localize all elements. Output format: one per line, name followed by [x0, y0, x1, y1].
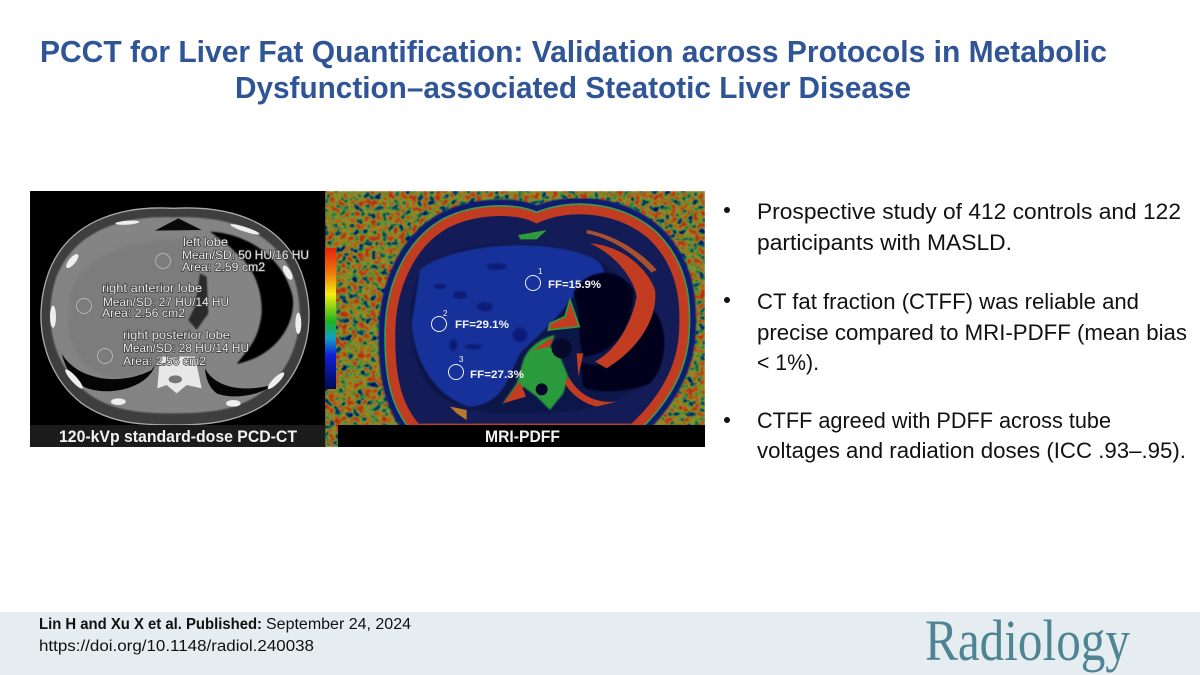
citation: https://doi.org/10.1148/radiol.240038: [39, 638, 314, 655]
bullet 3: [724, 408, 1186, 463]
MRI annotations: [443, 267, 601, 381]
bullet 2: [724, 289, 1187, 375]
footer band: [0, 608, 1200, 675]
CT annotations: Area: 2.59 cm2: [182, 260, 265, 274]
CT annotations: Area: 2.56 cm2: [102, 306, 185, 320]
CT annotations: Area: 2.56 cm2: [123, 354, 206, 368]
bullet 1: Prospective study of 412 controls and 122: [757, 199, 1181, 224]
citation: Lin H and Xu X et al. Published:: [39, 616, 262, 633]
MRI colour scale: [325, 248, 336, 389]
title: PCCT for Liver Fat Quantification: Validation across Protocols in Metabolic: [40, 34, 1107, 69]
bullet 2: CT fat fraction (CTFF) was reliable and: [757, 289, 1139, 314]
MRI annotations: 1: [538, 267, 543, 276]
CT annotations: Mean/SD: 27 HU/14 HU: [103, 295, 229, 309]
CT annotations: right anterior lobe: [102, 281, 202, 295]
panel: MRI-PDFF image: [325, 191, 705, 447]
CT annotations: right posterior lobe: [123, 328, 230, 342]
bullet 3: voltages and radiation doses (ICC .93–.95).: [757, 438, 1186, 463]
MRI annotations: FF=15.9%: [548, 279, 601, 291]
CT anatomy: [41, 208, 309, 425]
citation: September 24, 2024: [266, 616, 411, 633]
MRI caption bar: [338, 425, 705, 447]
CT annotations: Mean/SD: 50 HU/16 HU: [182, 248, 309, 262]
bullet 2: < 1%).: [757, 350, 819, 375]
panel: CT scan image: [30, 191, 326, 447]
bullet 1: [724, 199, 1181, 255]
key findings bullet list: [724, 199, 1187, 463]
citation: [39, 616, 411, 655]
CT regions of interest: [76, 254, 170, 364]
title: Dysfunction–associated Steatotic Liver Disease: [235, 70, 911, 105]
CT annotations: Mean/SD: 28 HU/14 HU: [123, 341, 249, 355]
MRI annotations: FF=29.1%: [455, 319, 509, 331]
MRI regions of interest: [432, 276, 540, 380]
MRI caption bar: MRI-PDFF: [485, 428, 560, 446]
MRI anatomy: [391, 210, 684, 428]
bullet 2: precise compared to MRI-PDFF (mean bias: [757, 320, 1187, 345]
MRI annotations: 2: [443, 309, 448, 318]
MRI annotations: FF=27.3%: [470, 369, 524, 381]
CT annotations: [102, 235, 309, 368]
Radiology logo: Radiology: [925, 608, 1130, 673]
MRI annotations: 3: [459, 355, 464, 364]
CT annotations: left lobe: [183, 235, 228, 249]
bullet 1: participants with MASLD.: [757, 230, 1012, 255]
title: [40, 34, 1107, 105]
CT caption bar: 120-kVp standard-dose PCD-CT: [59, 427, 298, 446]
bullet 3: CTFF agreed with PDFF across tube: [757, 408, 1111, 433]
